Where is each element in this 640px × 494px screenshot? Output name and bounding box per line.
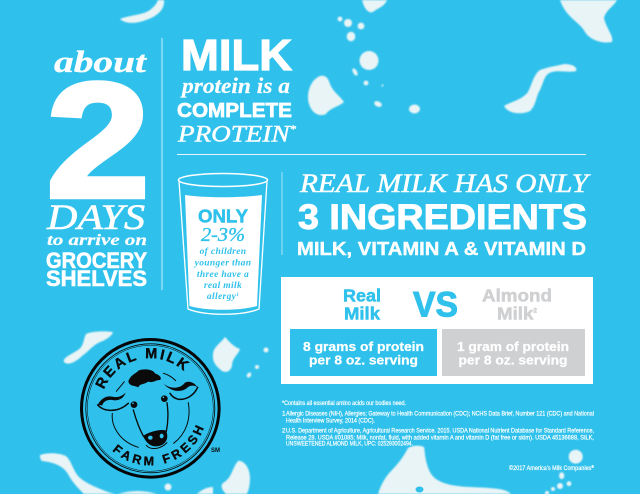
panel: two days to arrive (46, 44, 150, 291)
real milk heading (343, 286, 381, 324)
copyright: ©2017 America's Milk Companies (509, 465, 603, 472)
almond milk heading (482, 286, 552, 324)
about: about (54, 44, 148, 79)
footnotes: *Contains all essential amino acids our bodies need. (282, 400, 406, 407)
PROTEIN: * (290, 124, 297, 136)
glass text: percent: 2-3% (201, 224, 245, 246)
glass text: allergy note: younger than (194, 258, 251, 268)
real milk protein box: 8 grams of protein (303, 339, 424, 354)
3 ingredients: 3 INGREDIENTS (298, 198, 587, 237)
copyright: ® (591, 464, 594, 469)
almond milk protein box: per 8 oz. serving (458, 352, 568, 368)
real milk heading: Real (343, 286, 381, 306)
ingredient list: MILK, VITAMIN A & VITAMIN D (297, 239, 586, 259)
glass text: allergy note (194, 247, 251, 302)
PROTEIN: PROTEIN (178, 122, 273, 146)
big number 2: 2 (46, 49, 150, 232)
glass text: allergy note: allergy (207, 292, 236, 302)
almond milk heading: Almond (482, 286, 552, 306)
almond milk heading: Milk (497, 304, 531, 324)
footnotes: UNSWEETENED ALMOND MILK, UPC: 025293002494. (286, 441, 413, 448)
real milk protein box: per 8 oz. serving (309, 352, 418, 368)
glass text: only: ONLY (198, 206, 248, 226)
panel: real milk vs almond milk (281, 277, 593, 384)
footnotes: 2 (282, 428, 286, 435)
badge text bottom: FARM FRESH (112, 424, 204, 466)
footnotes (282, 400, 594, 448)
heading real milk has only: REAL MILK HAS ONLY (299, 169, 591, 198)
glass text: allergy note: real milk (204, 281, 242, 291)
to arrive on: to arrive on (47, 232, 147, 249)
DAYS: DAYS (46, 197, 145, 237)
icon: cow head (98, 369, 198, 449)
SHELVES: SHELVES (46, 266, 147, 291)
vertical divider right (282, 172, 283, 255)
almond milk protein box: 1 gram of protein (457, 339, 569, 354)
footnotes: Release 28. USDA #01085; Milk, nonfat, fluid, with added vitamin A and vitamin D (fat free or skim). USDA 45136688, SILK, (286, 434, 594, 441)
GROCERY: GROCERY (46, 248, 147, 273)
service mark: SM (211, 448, 220, 454)
panel: complete protein (177, 31, 297, 146)
vertical divider left (162, 38, 163, 290)
glass text: allergy note: of children (200, 247, 246, 257)
footnotes: 1 (282, 411, 286, 418)
footnotes: Health Interview Survey, 2014 (CDC). (286, 417, 375, 424)
real milk protein box (290, 329, 437, 376)
protein is a: protein is a (180, 73, 290, 98)
glass text: allergy note: 1 (236, 293, 239, 298)
MILK: MILK (181, 31, 292, 80)
VS: VS (413, 286, 458, 324)
icon: milk glass (178, 174, 268, 314)
almond milk protein box (442, 329, 585, 376)
badge text top: REAL MILK (95, 348, 190, 389)
footnotes: Allergic Diseases (NIH), Allergies; Gateway to Health Communication (CDC); NCHS Data Brief, Number 121 (CDC) and National (286, 411, 594, 418)
panel: three ingredients (297, 169, 591, 259)
badge: real milk farm fresh (80, 338, 221, 479)
horizontal divider (177, 154, 586, 155)
real milk heading: Milk (344, 304, 380, 324)
blue dot in splash (416, 486, 424, 492)
glass text: allergy note: three have a (197, 270, 249, 280)
COMPLETE: COMPLETE (177, 100, 292, 122)
footnotes: U.S. Department of Agriculture, Agricultural Research Service. 2015. USDA National Nutrient Database for Standard Reference, (286, 428, 594, 435)
almond milk heading: 2 (533, 308, 538, 314)
